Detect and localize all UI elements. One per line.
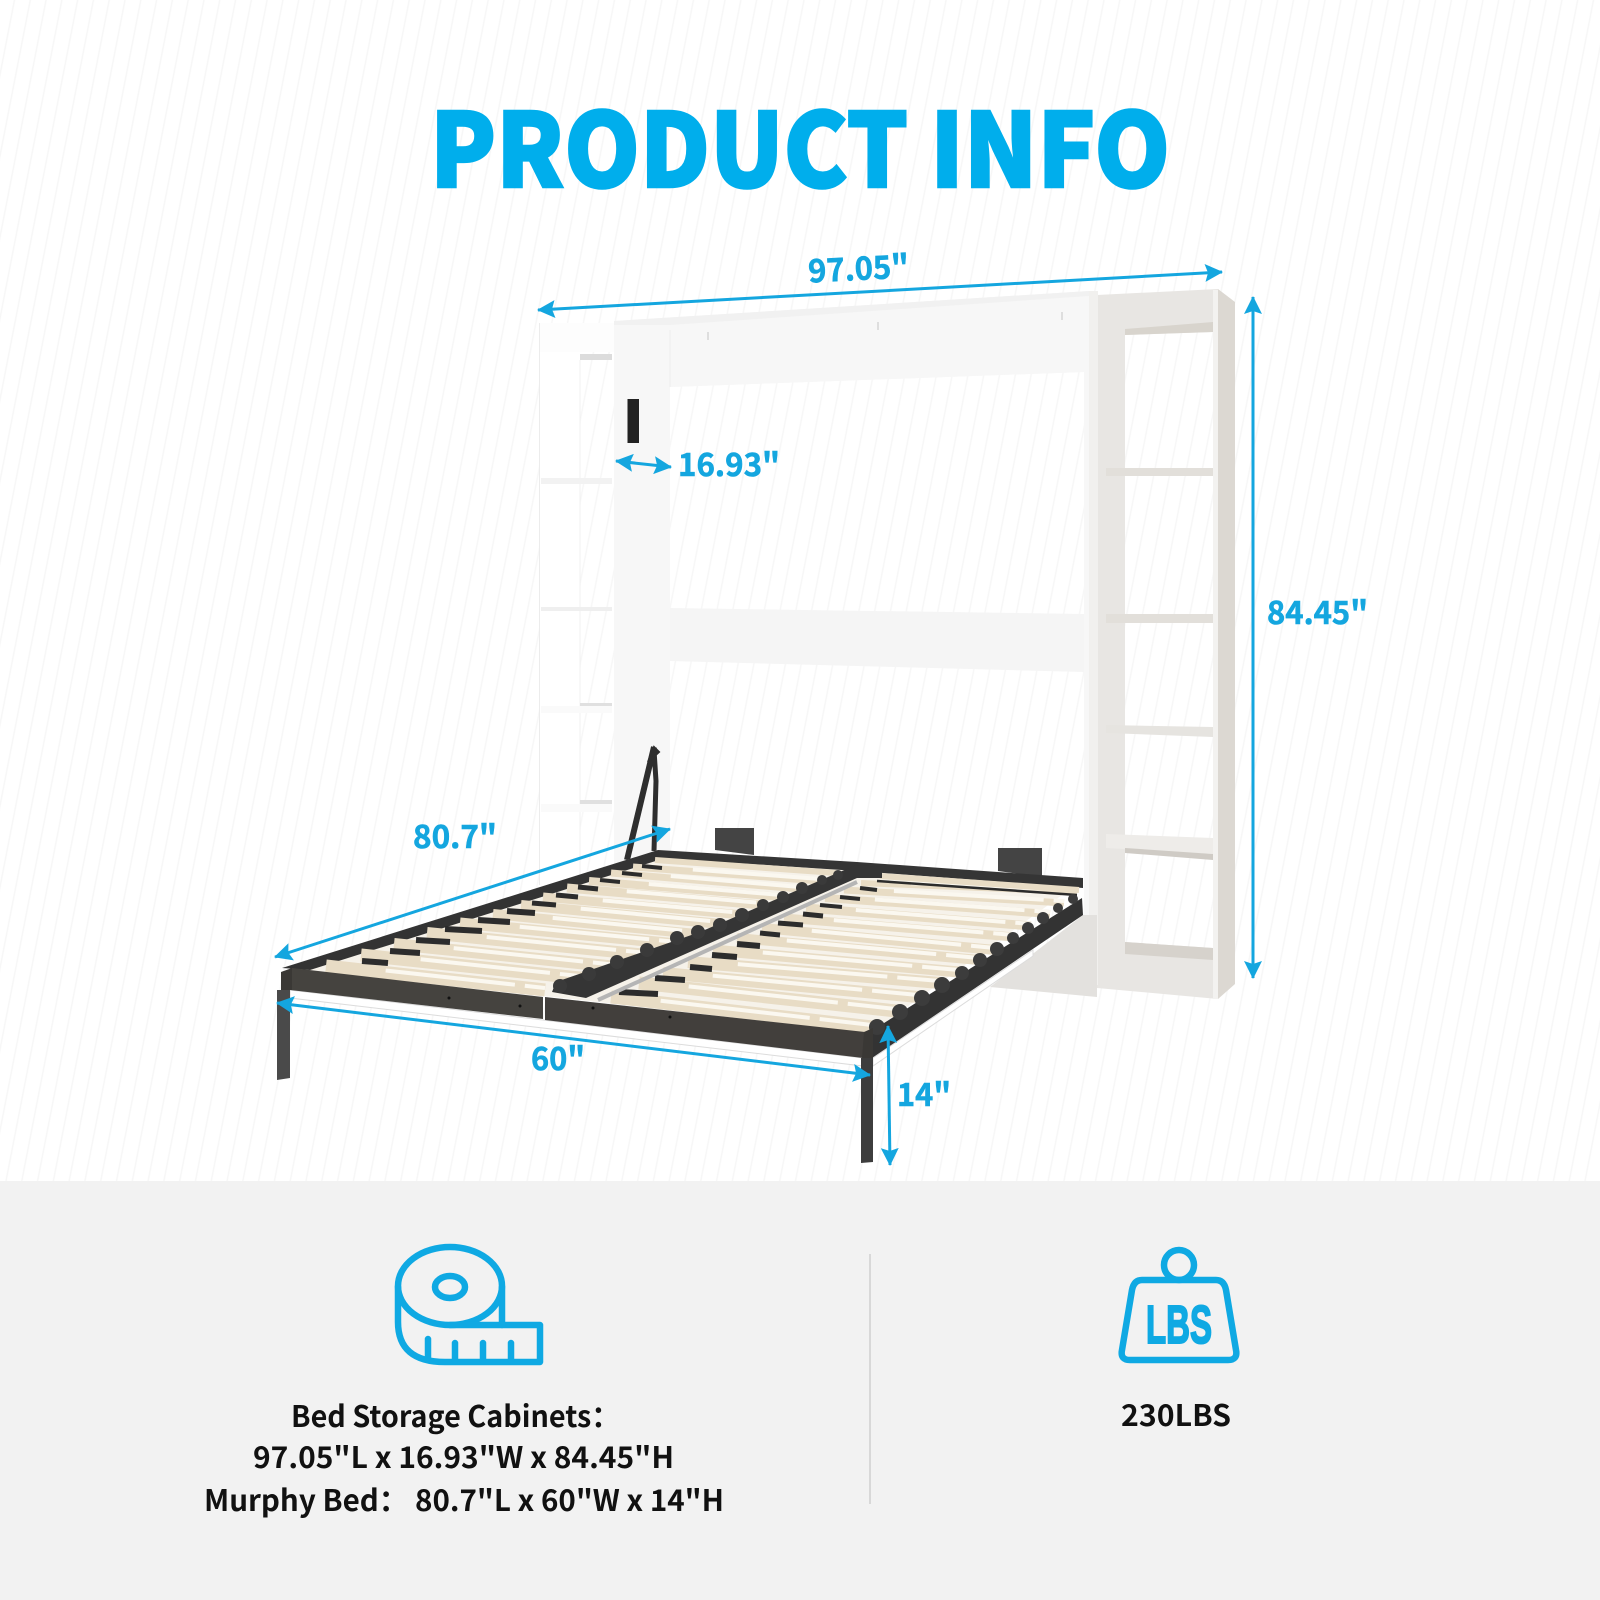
slats right half <box>611 883 1077 1027</box>
text: cabinet dimensions: 97.05"L x 16.93"W x 84.45"H <box>253 1435 674 1477</box>
label: 14: 14" <box>897 1070 951 1116</box>
arrow: cabinet height <box>1252 297 1254 978</box>
front rail <box>290 968 865 1058</box>
arrow: bed width <box>277 1003 870 1075</box>
slat highlights left half <box>326 865 820 988</box>
text: bed dimensions: Murphy Bed： 80.7"L x 60"W x 14"H <box>204 1478 724 1520</box>
cabinet base below bed <box>990 915 1097 997</box>
title: PRODUCT INFO <box>430 70 1170 217</box>
white under-rail strips <box>290 950 1033 1066</box>
slats left half <box>326 860 836 990</box>
dark slat tabs right <box>619 888 877 994</box>
central wall panel frame <box>614 291 1089 985</box>
gas strut <box>627 747 659 860</box>
center rail <box>552 865 882 1000</box>
arrow: cabinet depth <box>616 461 671 467</box>
icon: measuring tape <box>398 1247 540 1362</box>
dimension labels <box>413 241 1368 1116</box>
text: weight capacity: 230LBS <box>1121 1393 1231 1435</box>
slat highlights right half <box>611 881 1077 1025</box>
back rail <box>658 850 1083 888</box>
specification text <box>204 1394 724 1520</box>
bottom info band <box>0 1181 1600 1600</box>
dark slat tabs left <box>362 866 662 963</box>
left leg <box>277 990 290 1080</box>
murphy bed frame <box>277 747 1083 1163</box>
arrow: cabinet width <box>538 272 1222 310</box>
left side rail <box>282 850 662 970</box>
label: 97.05: 97.05" <box>807 241 910 293</box>
back slat right <box>880 876 1079 890</box>
label: 60: 60" <box>531 1034 585 1080</box>
icon: LBS weight: LBS <box>1146 1295 1212 1355</box>
wall brackets <box>715 828 1042 877</box>
text: cabinets heading: Bed Storage Cabinets： <box>291 1394 620 1436</box>
label: 84.45: 84.45" <box>1267 588 1368 634</box>
icon: LBS weight <box>1122 1250 1236 1360</box>
left bookcase <box>539 323 614 885</box>
arrow: bed length <box>275 829 670 957</box>
right side rail <box>869 894 1083 1058</box>
front corners <box>281 968 873 1058</box>
bed top surface <box>287 850 1083 1032</box>
label: 80.7: 80.7" <box>413 812 497 858</box>
right leg <box>861 1058 873 1163</box>
right bookcase <box>1089 289 1235 999</box>
divider <box>869 1254 871 1504</box>
back slat shadow <box>877 881 1077 895</box>
center rail bumps <box>553 870 843 993</box>
arrow: bed height <box>888 1026 890 1165</box>
control switch <box>628 399 639 443</box>
label: 16.93: 16.93" <box>678 440 780 486</box>
dimension arrows <box>275 272 1253 1165</box>
wall bed cabinet <box>539 289 1235 999</box>
